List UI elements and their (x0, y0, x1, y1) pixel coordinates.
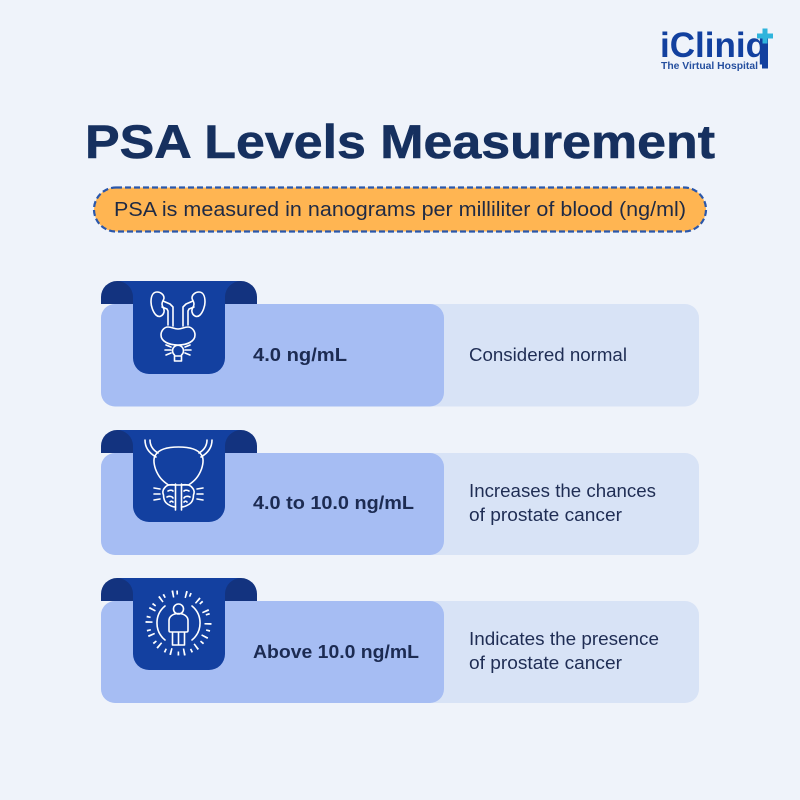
row 3 card (101, 578, 699, 703)
panel: row 1, 4.0 ng/mL (101, 281, 699, 406)
description: increases chances: Increases the chances (469, 480, 656, 501)
icon: person with radiating lines (148, 592, 209, 654)
subtitle pill: PSA is measured in nanograms per milliliter of blood (ng/ml) (114, 198, 686, 221)
icon: kidneys and bladder (151, 292, 205, 361)
panel: row 3, above 10.0 ng/mL (101, 578, 699, 703)
description: indicates presence: of prostate cancer (469, 652, 622, 673)
icon: bladder and prostate (145, 440, 212, 510)
logo: iCliniq: The Virtual Hospital (661, 60, 758, 72)
title: PSA Levels Measurement (85, 115, 715, 168)
description: indicates presence: Indicates the presence (469, 628, 659, 649)
description: normal: Considered normal (469, 344, 627, 365)
value: 4.0 to 10.0 ng/mL: 4.0 to 10.0 ng/mL (253, 492, 414, 513)
description: increases chances (469, 480, 656, 525)
subtitle pill (94, 188, 706, 232)
logo: iCliniq: iCliniq (660, 26, 767, 65)
panel: row 2, 4.0 to 10.0 ng/mL (101, 430, 699, 555)
value: 4.0 ng/mL: 4.0 ng/mL (253, 344, 347, 365)
description: increases chances: of prostate cancer (469, 504, 622, 525)
row 2 card (101, 430, 699, 555)
row 1 card (101, 281, 699, 406)
description: indicates presence (469, 628, 659, 673)
value: above 10.0 ng/mL: Above 10.0 ng/mL (253, 641, 419, 662)
